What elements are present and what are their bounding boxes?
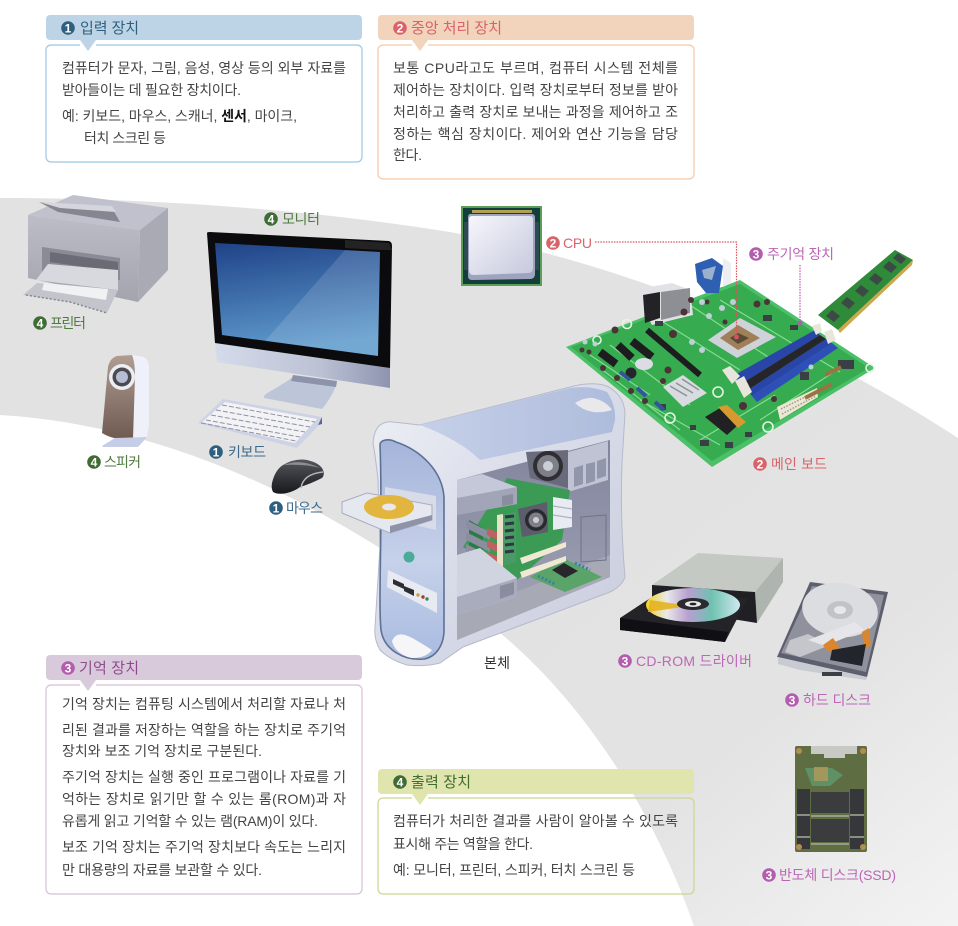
- text block: memory description: 장치와 보조 기억 장치로 구분된다.: [62, 743, 262, 759]
- label: CPU: 2: [550, 236, 557, 250]
- cpu socket: [708, 318, 776, 358]
- label: speaker: [87, 454, 141, 470]
- label: keyboard: 1: [213, 446, 220, 460]
- label: main board: 메인 보드: [771, 456, 827, 472]
- text block: CPU description: 정하는 핵심 장치이다. 제어와 연산 기능을 담당: [393, 126, 678, 142]
- text block: output description: 컴퓨터가 처리한 결과를 사람이 알아볼 수 있도록: [393, 813, 678, 829]
- background band: [0, 198, 958, 926]
- label: SSD: 반도체 디스크(SSD): [779, 867, 896, 883]
- label: main board: 2: [757, 458, 764, 472]
- label: printer: 4: [37, 316, 44, 330]
- memory slots: [733, 330, 838, 402]
- label: case: 본체: [484, 655, 510, 671]
- label: CD-ROM drive: CD-ROM 드라이버: [636, 653, 752, 669]
- icon: mouse: [272, 460, 324, 494]
- panel: central processing unit: [378, 15, 694, 179]
- icon: speaker: [102, 355, 149, 447]
- icon: hard disk: [777, 578, 888, 680]
- text block: output description: 표시해 주는 역할을 한다.: [393, 836, 533, 852]
- heading: input devices: 1: [65, 22, 72, 36]
- text block: CPU description: 제어하는 장치이다. 입력 장치로부터 정보를 받아: [393, 82, 678, 98]
- label: keyboard: 키보드: [228, 444, 266, 460]
- heading: central processing unit: 2: [397, 22, 404, 36]
- label: mouse: [269, 500, 323, 516]
- heading: input devices: [46, 15, 362, 51]
- text block: memory description: 만 대용량의 자료를 보관할 수 있다.: [62, 862, 262, 878]
- icon: CPU chip: [461, 206, 542, 286]
- label: keyboard: [209, 444, 266, 460]
- label: CPU: CPU: [563, 235, 592, 251]
- label: monitor: [264, 211, 320, 227]
- io ports: [633, 258, 731, 325]
- text block: memory description: 억하는 장치로 읽기만 할 수 있는 롬(ROM)과 자: [62, 791, 346, 807]
- heading: central processing unit: [378, 15, 694, 51]
- green board and parts: [463, 478, 570, 580]
- text block: input devices description: 컴퓨터가 문자, 그림, 음성, 영상 등의 외부 자료를: [62, 60, 346, 76]
- label: printer: 프린터: [50, 315, 86, 331]
- top surface: [420, 387, 615, 460]
- heading: memory devices: 3: [65, 662, 72, 676]
- heading: memory devices: [46, 655, 362, 691]
- label: CPU: [546, 235, 592, 251]
- icon: SSD: [795, 746, 867, 852]
- heading: output devices: 출력 장치: [411, 774, 471, 791]
- text block: CPU description: 처리하고 출력 장치로 보내는 과정을 제어하고 조: [393, 104, 678, 120]
- text block: memory description: [46, 685, 362, 894]
- text block: memory description: 유롭게 읽고 기억할 수 있는 램(RAM)이 있다.: [62, 813, 318, 829]
- panel: input devices: [46, 15, 362, 162]
- traces on the board: [590, 300, 840, 445]
- silver frame: [373, 384, 625, 666]
- slot clips: [722, 323, 836, 398]
- heading: central processing unit: 중앙 처리 장치: [411, 20, 502, 37]
- power button: [404, 552, 414, 562]
- leader line: main memory: [798, 265, 802, 325]
- label: hard disk: 하드 디스크: [803, 692, 871, 708]
- expansion slots: [647, 330, 700, 375]
- battery and heatsink: [635, 358, 653, 370]
- front panel: [380, 440, 444, 659]
- expansion card: [530, 558, 602, 592]
- icon: CD-ROM drive: [620, 553, 783, 642]
- heading: output devices: 4: [397, 776, 404, 790]
- text block: memory description: 리된 결과를 저장하는 역할을 하는 장치로 주기억: [62, 722, 346, 738]
- icon: RAM stick: [818, 250, 913, 333]
- text block: output description: [378, 798, 694, 894]
- label: monitor: 4: [268, 212, 275, 226]
- text block: input devices description: 터치 스크린 등: [84, 130, 166, 146]
- label: main memory: 3: [753, 248, 760, 262]
- icon: main board: [566, 258, 875, 467]
- icon: computer case: [342, 384, 625, 666]
- cd tray: [385, 487, 436, 530]
- capacitors: [580, 297, 777, 410]
- bays: [457, 474, 517, 515]
- label: speaker: 스피커: [104, 454, 141, 470]
- label: mouse: 마우스: [286, 500, 323, 516]
- label: speaker: 4: [91, 456, 98, 470]
- text block: input devices description: [46, 45, 362, 162]
- panel: memory devices: [46, 655, 362, 894]
- text block: CPU description: [378, 45, 694, 179]
- label: mouse: 1: [273, 502, 280, 516]
- heading: memory devices: 기억 장치: [79, 660, 139, 677]
- text block: memory description: 기억 장치는 컴퓨팅 시스템에서 처리할 자료나 처: [62, 696, 346, 712]
- label: main memory: 주기억 장치: [767, 246, 834, 262]
- text block: input devices description: 받아들이는 데 필요한 장치이다.: [62, 82, 241, 98]
- icon: monitor: [207, 232, 392, 409]
- label: CD-ROM drive: 3: [622, 654, 629, 668]
- power connector: [777, 388, 818, 420]
- label: SSD: 3: [766, 868, 773, 882]
- front ports: [387, 570, 437, 613]
- power supply and fan: [526, 450, 568, 488]
- text block: output description: 예: 모니터, 프린터, 스피커, 터치 스크린 등: [393, 862, 635, 878]
- interior: [457, 440, 610, 640]
- text block: memory description: 주기억 장치는 실행 중인 프로그램이나 자료를 기: [62, 769, 346, 785]
- mounting rings: [593, 320, 874, 432]
- panel: output devices: [378, 769, 694, 894]
- label: printer: [33, 315, 86, 331]
- text block: CPU description: 보통 CPU라고도 부르며, 컴퓨터 시스템 전체를: [393, 60, 678, 76]
- text block: input devices description: 예: 키보드, 마우스, 스캐너, 센서, 마이크,: [62, 108, 297, 124]
- heading: input devices: 입력 장치: [80, 20, 139, 37]
- heading: output devices: [378, 769, 694, 805]
- icon: printer: [23, 195, 168, 313]
- text block: CPU description: 한다.: [393, 147, 422, 163]
- text block: memory description: 보조 기억 장치는 주기억 장치보다 속도는 느리지: [62, 839, 346, 855]
- leader line: CPU: [595, 242, 739, 339]
- sata connectors: [705, 408, 738, 435]
- label: hard disk: 3: [789, 694, 796, 708]
- icon: keyboard: [198, 399, 322, 448]
- label: monitor: 모니터: [282, 211, 320, 227]
